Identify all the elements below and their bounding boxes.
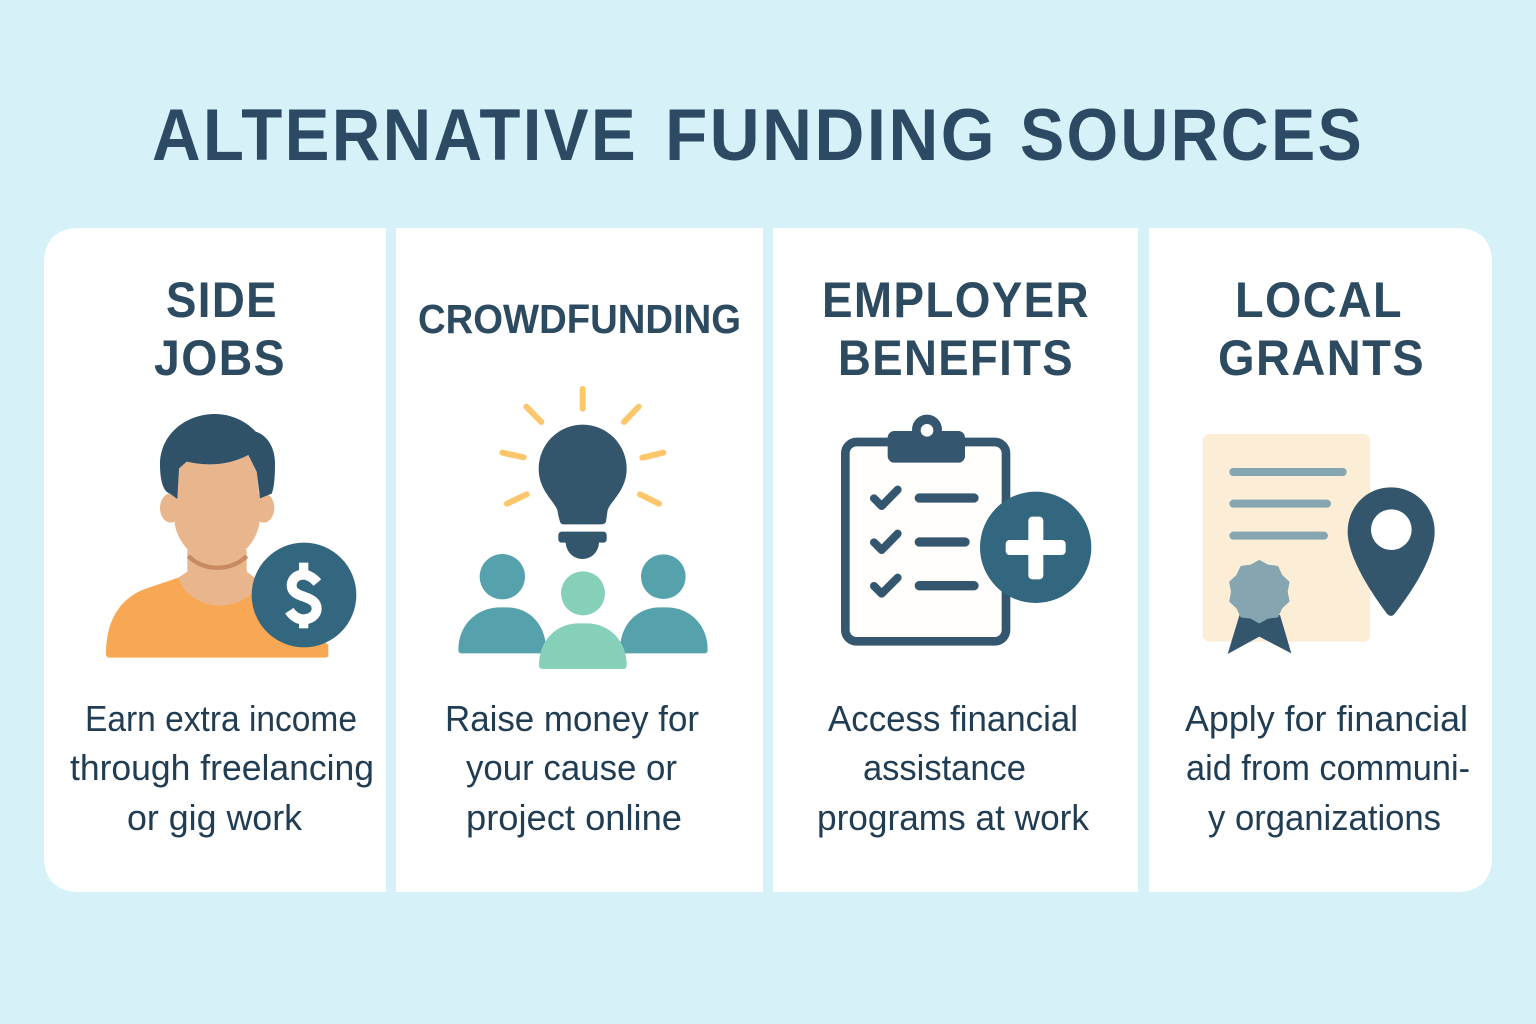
heading: employer benefits [822, 272, 1090, 386]
description: crowdfunding: project online [466, 797, 682, 838]
heading: local grants: GRANTS [1218, 330, 1425, 386]
icon: certificate with location pin [1203, 434, 1435, 654]
description: employer benefits [817, 698, 1090, 838]
heading: employer benefits: EMPLOYER [822, 272, 1090, 328]
icon: person with dollar coin [106, 414, 356, 658]
heading: local grants [1218, 272, 1425, 386]
description: side jobs [70, 698, 374, 838]
description: local grants: y organizations [1208, 797, 1441, 838]
description: side jobs: through freelancing [70, 747, 374, 788]
description: crowdfunding [445, 698, 699, 838]
heading: side jobs [154, 272, 286, 386]
panel: local grants [1149, 228, 1492, 892]
heading: crowdfunding: CROWDFUNDING [418, 296, 741, 342]
heading: side jobs: SIDE [166, 272, 278, 328]
description: local grants: Apply for financial [1185, 698, 1468, 739]
title: ALTERNATIVE [152, 95, 638, 176]
title [152, 95, 1364, 176]
heading: side jobs: JOBS [154, 330, 286, 386]
description: side jobs: or gig work [127, 797, 303, 838]
title: SOURCES [1020, 95, 1364, 176]
description: crowdfunding: your cause or [466, 747, 677, 788]
description: side jobs: Earn extra income [85, 698, 357, 739]
panel: employer benefits [773, 228, 1138, 892]
description: employer benefits: programs at work [817, 797, 1090, 838]
title: FUNDING [665, 95, 997, 176]
panel: side jobs [44, 228, 386, 892]
description: crowdfunding: Raise money for [445, 698, 699, 739]
heading: employer benefits: BENEFITS [838, 330, 1074, 386]
icon: light bulb above three people [458, 389, 708, 669]
heading: local grants: LOCAL [1235, 272, 1403, 328]
panel: crowdfunding [396, 228, 763, 892]
description: local grants: aid from communi- [1186, 747, 1470, 788]
icon: clipboard checklist with plus [845, 415, 1091, 641]
description: local grants [1185, 698, 1470, 838]
description: employer benefits: assistance [863, 747, 1026, 788]
description: employer benefits: Access financial [828, 698, 1078, 739]
